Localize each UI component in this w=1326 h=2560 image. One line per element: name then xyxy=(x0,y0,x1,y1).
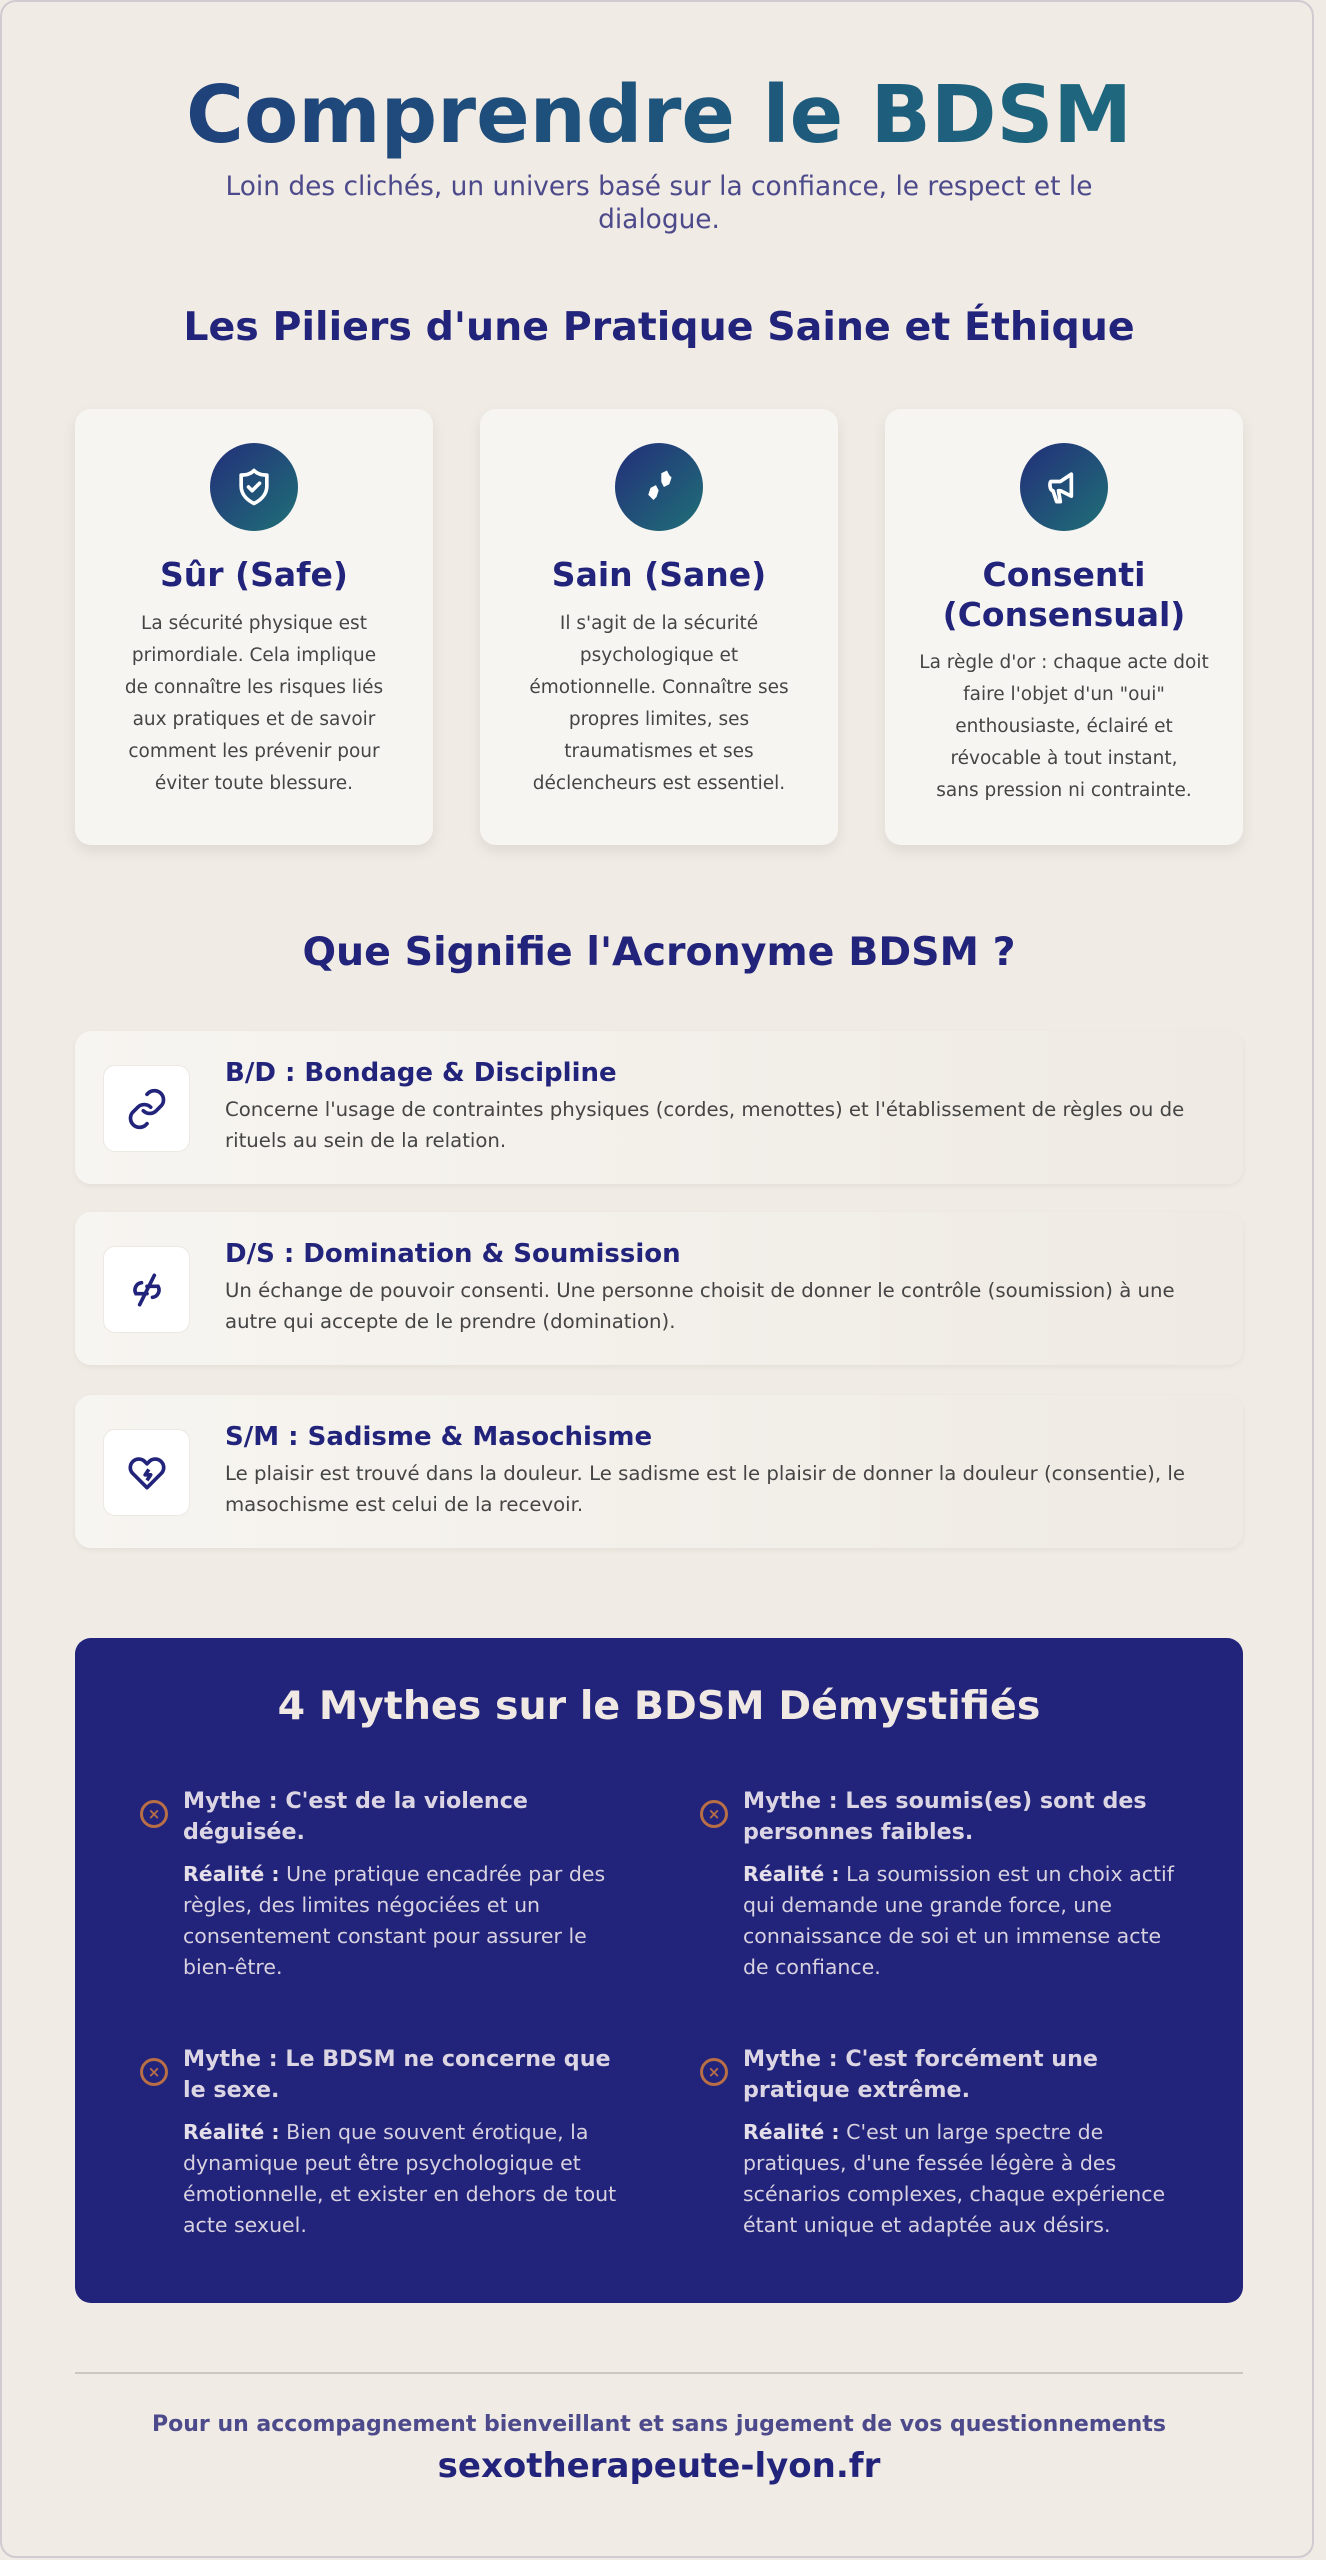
icon: heart xyxy=(103,1429,190,1516)
myth 2: Réalité : La soumission est un choix actif qui demande une grande force, une connaissance de soi et un immense acte de confiance. xyxy=(743,1862,1174,1979)
item: B/D xyxy=(75,1031,1243,1184)
item: D/S xyxy=(75,1212,1243,1365)
myth 4: Mythe : C'est forcément une pratique extrême. xyxy=(743,2046,1098,2103)
card text: Il s'agit de la sécurité psychologique et émotionnelle. Connaître ses propres limites, ses traumatismes et ses déclencheurs est essentiel. xyxy=(529,613,789,794)
icon: brain xyxy=(615,443,703,531)
myth 3: Réalité : Bien que souvent érotique, la dynamique peut être psychologique et émotionnelle, et exister en dehors de tout acte sexuel. xyxy=(183,2120,616,2237)
card text: primordiale. Cela implique xyxy=(132,645,376,666)
card text: comment les prévenir pour xyxy=(128,741,380,762)
panel: myths: × xyxy=(708,1805,720,1823)
card: safe xyxy=(75,409,433,845)
card title: (Consensual) xyxy=(943,595,1185,634)
icon: link xyxy=(103,1065,190,1152)
card text: sans pression ni contrainte. xyxy=(936,780,1192,801)
card: sane xyxy=(480,409,838,845)
card title: Sain (Sane) xyxy=(552,555,766,594)
heading: acronyme: Que Signifie l'Acronyme BDSM ? xyxy=(302,929,1016,975)
panel: myths: × xyxy=(708,2063,720,2081)
card title xyxy=(943,555,1185,634)
myth 4 xyxy=(700,2046,1165,2237)
title: B/D : Bondage & Discipline xyxy=(225,1058,617,1088)
myth 4: Réalité : C'est un large spectre de pratiques, d'une fessée légère à des scénarios complexes, chaque expérience étant unique et adaptée aux désirs. xyxy=(743,2120,1165,2237)
myth 2 xyxy=(700,1788,1174,1979)
item: S/M xyxy=(75,1395,1243,1548)
text: Un échange de pouvoir consenti. Une personne choisit de donner le contrôle (soumission) à une autre qui accepte de le prendre (domination). xyxy=(225,1279,1175,1333)
card: consensual xyxy=(885,409,1243,845)
text: Concerne l'usage de contraintes physiques (cordes, menottes) et l'établissement de règles ou de rituels au sein de la relation. xyxy=(225,1098,1184,1152)
footer site: sexotherapeute-lyon.fr xyxy=(438,2446,880,2486)
title: S/M : Sadisme & Masochisme xyxy=(225,1422,652,1452)
text: Le plaisir est trouvé dans la douleur. Le sadisme est le plaisir de donner la douleur (consentie), le masochisme est celui de la recevoir. xyxy=(225,1462,1185,1516)
myth 3: Mythe : Le BDSM ne concerne que le sexe. xyxy=(183,2046,611,2103)
card text: éviter toute blessure. xyxy=(155,773,353,794)
myth 1: Réalité : Une pratique encadrée par des règles, des limites négociées et un consentement constant pour assurer le bien-être. xyxy=(183,1862,605,1979)
icon: megaphone xyxy=(1020,443,1108,531)
title: Comprendre le BDSM xyxy=(186,69,1132,161)
myth 1 xyxy=(140,1788,605,1979)
icon: shield xyxy=(210,443,298,531)
card text: de connaître les risques liés xyxy=(125,677,383,698)
myth 1: Mythe : C'est de la violence déguisée. xyxy=(183,1788,528,1845)
footer text: Pour un accompagnement bienveillant et sans jugement de vos questionnements xyxy=(152,2412,1166,2437)
card text: La règle d'or : chaque acte doit faire l'objet d'un "oui" enthousiaste, éclairé et révocable à tout instant, xyxy=(919,652,1209,769)
card text xyxy=(125,613,383,794)
panel: myths: × xyxy=(148,1805,160,1823)
myth 2: Mythe : Les soumis(es) sont des personnes faibles. xyxy=(743,1788,1147,1845)
subtitle: Loin des clichés, un univers basé sur la confiance, le respect et le dialogue. xyxy=(226,171,1092,235)
myth 3 xyxy=(140,2046,616,2237)
panel: myths xyxy=(75,1638,1243,2303)
card text: La sécurité physique est xyxy=(141,613,367,634)
card title: Sûr (Safe) xyxy=(160,555,348,594)
title xyxy=(2,65,1316,165)
panel: myths: × xyxy=(148,2063,160,2081)
icon: link broken xyxy=(103,1246,190,1333)
myths title: 4 Mythes sur le BDSM Démystifiés xyxy=(278,1683,1040,1729)
heading: piliers: Les Piliers d'une Pratique Saine et Éthique xyxy=(183,304,1135,350)
card title: Consenti xyxy=(982,555,1146,594)
title: D/S : Domination & Soumission xyxy=(225,1239,681,1269)
card text: aux pratiques et de savoir xyxy=(133,709,375,730)
